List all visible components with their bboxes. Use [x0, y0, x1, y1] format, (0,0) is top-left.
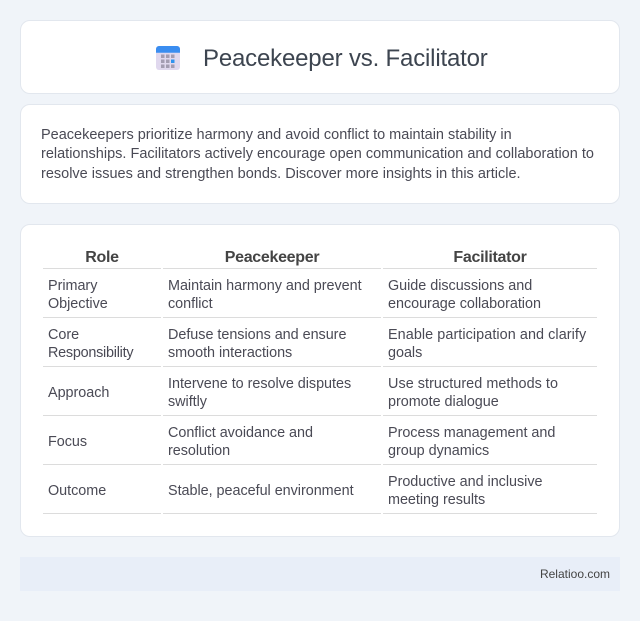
- row: Core Responsibility: smooth interactions: [168, 345, 292, 361]
- header: Role: Role: [85, 249, 119, 266]
- panel: title card: [20, 20, 620, 94]
- row: Approach: Use structured methods to: [388, 376, 558, 392]
- row: Outcome: meeting results: [388, 492, 485, 508]
- row: Focus: Process management and: [388, 425, 555, 441]
- row: Primary Objective: Maintain harmony and prevent: [168, 278, 362, 294]
- header: Facilitator: Facilitator: [453, 249, 527, 266]
- row: Focus: [48, 425, 555, 459]
- header: Peacekeeper: Peacekeeper: [225, 249, 319, 266]
- row: Outcome: Stable, peaceful environment: [168, 483, 354, 499]
- row: Core Responsibility: goals: [388, 345, 422, 361]
- intro text: relationships. Facilitators actively encourage open communication and collaboration to: [41, 146, 594, 162]
- row: Focus: Conflict avoidance and: [168, 425, 313, 441]
- row: Primary Objective: Objective: [48, 296, 108, 312]
- panel: comparison table card: [20, 224, 620, 537]
- icon: calendar: [156, 46, 180, 70]
- panel: intro card: [20, 104, 620, 204]
- row: Approach: Approach: [48, 385, 109, 401]
- row: Primary Objective: Guide discussions and: [388, 278, 532, 294]
- row: Primary Objective: Primary: [48, 278, 97, 294]
- row: Approach: [48, 376, 558, 410]
- row: Core Responsibility: Enable participation and clarify: [388, 327, 586, 343]
- row: Core Responsibility: Defuse tensions and ensure: [168, 327, 346, 343]
- intro text: resolve issues and strengthen bonds. Discover more insights in this article.: [41, 166, 521, 182]
- footer credit: Relatioo.com: [540, 567, 610, 581]
- row: Approach: swiftly: [168, 394, 207, 410]
- title: Peacekeeper vs. Facilitator: [203, 45, 488, 72]
- row: Outcome: Outcome: [48, 483, 106, 499]
- row: Approach: promote dialogue: [388, 394, 499, 410]
- row: Primary Objective: encourage collaboration: [388, 296, 541, 312]
- row: Approach: Intervene to resolve disputes: [168, 376, 351, 392]
- row: Outcome: Productive and inclusive: [388, 474, 542, 490]
- row: Primary Objective: conflict: [168, 296, 213, 312]
- row: Focus: resolution: [168, 443, 230, 459]
- intro text: Peacekeepers prioritize harmony and avoid conflict to maintain stability in: [41, 127, 512, 143]
- row: Primary Objective: [48, 278, 541, 312]
- footer bar: [20, 557, 620, 591]
- row: Core Responsibility: [48, 327, 586, 361]
- row: Focus: group dynamics: [388, 443, 489, 459]
- intro text: [41, 127, 594, 182]
- row: Outcome: [48, 474, 542, 508]
- row: Focus: Focus: [48, 434, 87, 450]
- row: Core Responsibility: Core: [48, 327, 79, 343]
- row: Core Responsibility: Responsibility: [48, 345, 133, 361]
